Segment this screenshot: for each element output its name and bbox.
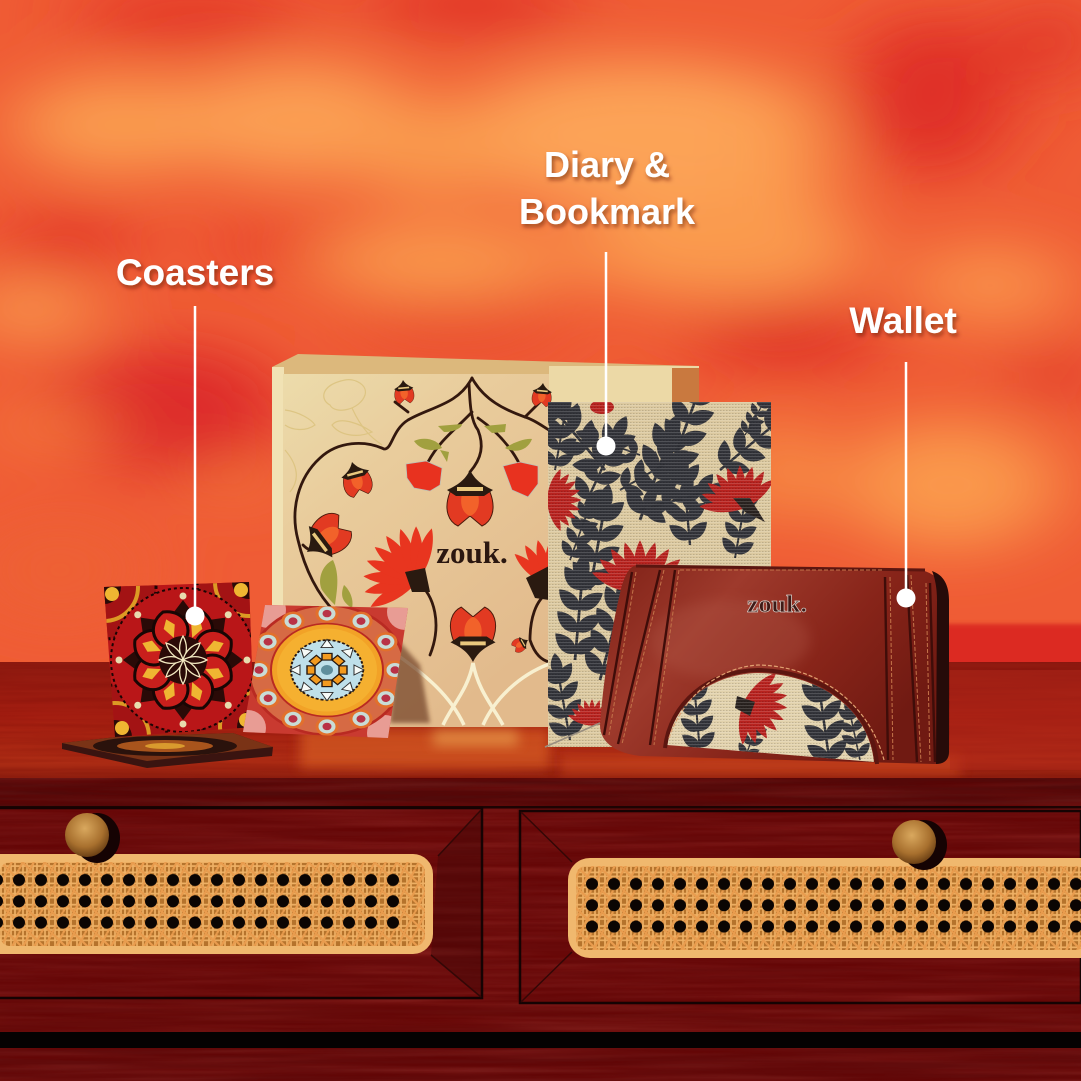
central rosette (111, 588, 255, 732)
box flowers (295, 379, 553, 662)
label: Diary & Bookmark: Diary & (544, 144, 670, 185)
label: Coasters: Coasters (116, 252, 274, 293)
diary red flowers (544, 400, 782, 728)
gold lines (400, 657, 549, 725)
wallet (545, 565, 949, 768)
coaster: blue and yellow mandala (243, 605, 408, 738)
wallet stitching (604, 570, 935, 762)
background: orange and red cloudy wall (0, 0, 1081, 674)
green leaves (320, 424, 532, 608)
arch line art (295, 378, 549, 662)
right drawer (520, 811, 1081, 1003)
wallet fabric window (660, 663, 884, 768)
faint floral outlines (285, 380, 382, 492)
left drawer (0, 808, 482, 998)
coaster: red mandala (104, 582, 252, 737)
cane panel right (568, 858, 1081, 958)
fan flowers (343, 506, 607, 625)
label: Wallet: Wallet (849, 300, 957, 341)
coaster: flat on table (62, 733, 273, 768)
label: Diary & Bookmark (519, 144, 696, 456)
knob left (65, 813, 120, 863)
diary leaf sprays (548, 402, 771, 740)
wallet logo: zouk. (747, 592, 807, 618)
label: Diary & Bookmark: Bookmark (519, 191, 696, 232)
cabinet front (0, 778, 1081, 1081)
gift box (272, 354, 699, 727)
cane panel left (0, 854, 433, 954)
coaster shadow on box (390, 640, 430, 723)
diary (548, 402, 771, 747)
knob right (892, 820, 947, 870)
label: Coasters (116, 252, 274, 626)
brand on box: zouk. (436, 535, 508, 570)
table top (0, 662, 1081, 780)
label: Wallet (849, 300, 957, 608)
zipper pull (545, 723, 600, 747)
